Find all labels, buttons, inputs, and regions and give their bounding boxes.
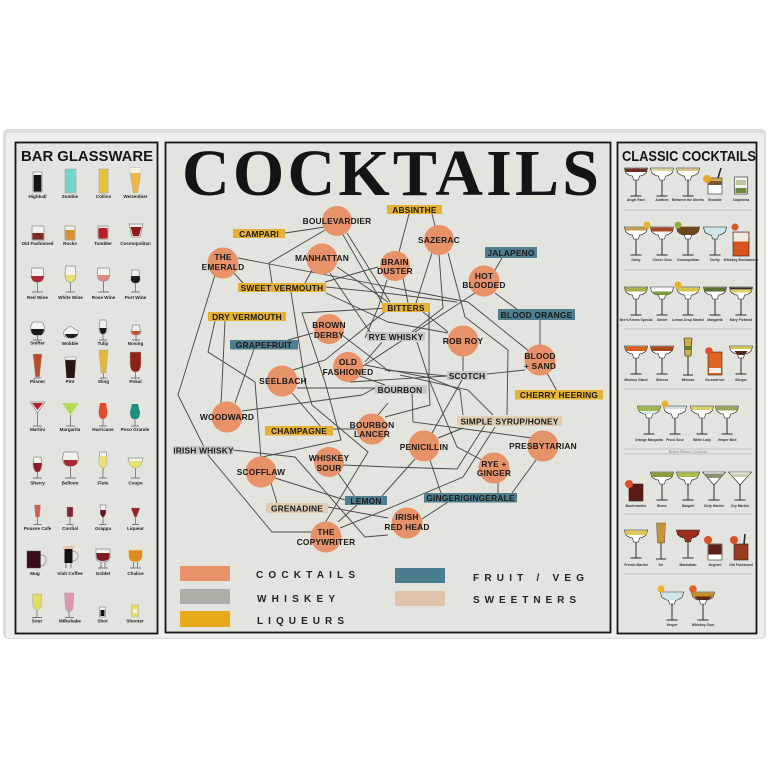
node: hot blooded xyxy=(462,266,506,296)
icon: balloon xyxy=(62,452,79,486)
icon: highball: Highball xyxy=(28,194,47,199)
icon: cordial: Cordial xyxy=(62,526,78,531)
icon: tulip: Tulip xyxy=(98,341,109,346)
node: old fashioned xyxy=(323,352,373,382)
icon: balloon: Balloon xyxy=(62,480,79,486)
glass: cosmopolitan xyxy=(674,222,700,262)
node: sazerac xyxy=(418,225,460,255)
icon: zombie: Zombie xyxy=(62,194,79,199)
glass: dry martini: Dry Martini xyxy=(731,504,749,508)
tag: grapefruit: GRAPEFRUIT xyxy=(236,340,293,350)
icon: martini xyxy=(30,402,45,432)
icon: weizenbier: Weizenbier xyxy=(123,194,148,199)
node: seelbach: SEELBACH xyxy=(259,376,307,386)
glass: between the sheets: Between the Sheets xyxy=(672,198,704,202)
tag: lemon: LEMON xyxy=(350,496,382,506)
glass: old fashioned xyxy=(729,534,753,567)
glass: french martini xyxy=(624,530,648,567)
node: brain duster: BRAIN xyxy=(381,257,409,267)
glass: screwdriver: Screwdriver xyxy=(705,378,725,382)
tag: rye whisky: RYE WHISKY xyxy=(369,332,424,342)
subheading: before dinner cocktails: Before Dinner Cocktails xyxy=(669,449,708,454)
icon: sherry xyxy=(30,457,45,486)
node: brain duster xyxy=(377,251,413,281)
node: bourbon lancer: LANCER xyxy=(354,429,390,439)
glass: gimlet: Gimlet xyxy=(657,318,668,322)
glass: bee's knees xyxy=(620,287,652,322)
icon: pilsner: Pilsner xyxy=(30,379,45,384)
icon: irish coffee xyxy=(57,546,83,576)
legend: COCKTAILS xyxy=(256,570,355,581)
glass: angel face xyxy=(624,168,648,202)
tag: campari: CAMPARI xyxy=(239,229,279,239)
glass: derby: Derby xyxy=(710,258,720,262)
glass: cosmopolitan: Cosmopolitan xyxy=(677,258,699,262)
icon: pilsner xyxy=(30,354,45,384)
network connection lines xyxy=(178,214,557,537)
glass: between the sheets xyxy=(672,168,704,202)
node: brown derby: BROWN xyxy=(312,320,346,330)
heading: bar glassware: BAR GLASSWARE xyxy=(21,148,153,165)
glass: boulevardier: Boulevardier xyxy=(626,504,647,508)
tag: dry vermouth: DRY VERMOUTH xyxy=(212,312,282,322)
icon: chalice: Chalice xyxy=(127,571,144,576)
icon: weizenbier xyxy=(123,168,148,199)
glass: monkey gland: Monkey Gland xyxy=(624,378,648,382)
icon: sling xyxy=(98,350,109,384)
glass: gimlet xyxy=(650,287,674,322)
glass: old fashioned: Old Fashioned xyxy=(729,563,753,567)
tag: grenadine: GRENADINE xyxy=(271,504,323,514)
glass: daisy: Daisy xyxy=(631,258,641,262)
node: the emerald: EMERALD xyxy=(202,262,244,272)
icon: goblet: Goblet xyxy=(96,571,111,576)
node: woodward xyxy=(200,402,254,432)
panel: classic cocktails xyxy=(618,142,759,634)
node: boulevardier: BOULEVARDIER xyxy=(303,216,371,226)
icon: poco grande: Poco Grande xyxy=(121,427,150,432)
glass: mimosa: Mimosa xyxy=(682,378,694,382)
glass: sidecar: Sidecar xyxy=(656,378,669,382)
icon: snifter xyxy=(30,322,45,346)
panel: cocktails network xyxy=(166,137,610,632)
icon: liqueur xyxy=(127,508,144,531)
glass: whiskey bushwacker xyxy=(724,224,759,262)
icon: pint xyxy=(65,357,76,384)
legend: WHISKEY xyxy=(257,594,335,605)
icon: cosmopolitan xyxy=(120,224,151,246)
glass: manhattan: Manhattan xyxy=(680,563,696,567)
row dividers xyxy=(624,210,752,574)
icon: rose wine xyxy=(92,268,116,300)
icon: milkshake: Milkshake xyxy=(59,618,81,624)
icon: coupe: Coupe xyxy=(128,480,143,486)
icon: flute: Flute xyxy=(98,480,109,486)
icon: old fashioned: Old Fashioned xyxy=(22,241,54,246)
icon: cosmopolitan: Cosmopolitan xyxy=(120,241,151,246)
node: whiskey sour xyxy=(309,447,349,477)
glass: boulevardier xyxy=(625,480,647,508)
node: rob roy: ROB ROY xyxy=(443,336,483,346)
glass: bronx: Bronx xyxy=(657,504,667,508)
icon: margarita: Margarita xyxy=(60,427,81,432)
icon: tumbler: Tumbler xyxy=(94,241,112,246)
glass: bee's knees: Bee's Knees Special xyxy=(620,318,652,322)
icon: martini: Martini xyxy=(30,427,45,432)
icon: white wine xyxy=(58,266,83,300)
node: seelbach xyxy=(259,366,307,396)
node: irish red head xyxy=(384,508,430,538)
glass: angel face: Angel Face xyxy=(627,198,645,202)
node: presbytarian: PRESBYTARIAN xyxy=(509,441,577,451)
glass: whiskey bushwacker: Whiskey Bushwacker xyxy=(724,258,759,262)
icon: sherry: Sherry xyxy=(30,480,45,486)
node: the emerald: THE xyxy=(214,252,232,262)
node: presbytarian xyxy=(509,430,577,462)
icon: collins: Collins xyxy=(96,194,112,199)
panel: bar glassware xyxy=(16,142,158,634)
tag: absinthe: ABSINTHE xyxy=(392,205,437,215)
glass: negroni xyxy=(704,536,722,567)
node: rob roy xyxy=(443,326,483,356)
node: hot blooded: BLOODED xyxy=(462,280,506,290)
glass: margarita xyxy=(704,287,726,322)
node: whiskey sour: SOUR xyxy=(316,463,342,473)
icon: port wine: Port Wine xyxy=(125,295,147,300)
glass: negroni: Negroni xyxy=(709,563,721,567)
icon: pokal: Pokal xyxy=(129,379,142,384)
icon: hurricane: Hurricane xyxy=(92,427,114,432)
icon: rose wine: Rose Wine xyxy=(92,295,116,300)
glass: daiquiri xyxy=(676,472,700,508)
icon: sour: Sour xyxy=(32,618,42,624)
icon: pokal xyxy=(129,352,142,384)
glass: dry martini xyxy=(728,472,752,508)
glass: mary pickford: Mary Pickford xyxy=(730,318,752,322)
glass: derby xyxy=(704,227,726,262)
icon: red wine xyxy=(27,268,48,300)
glass: sidecar xyxy=(650,346,674,382)
icon: sour xyxy=(32,594,42,624)
node: the copywriter: THE xyxy=(317,527,335,537)
glass: screwdriver xyxy=(705,347,725,382)
glass: mary pickford xyxy=(730,287,752,322)
node: the copywriter: COPYWRITER xyxy=(297,537,355,547)
glass: bramble: Bramble xyxy=(708,198,722,202)
node: rye and ginger: GINGER xyxy=(477,468,511,478)
icon: shot: Shot xyxy=(97,618,108,624)
node: hot blooded: HOT xyxy=(475,271,494,281)
icon: pint: Pint xyxy=(66,379,75,384)
tag: bourbon: BOURBON xyxy=(378,385,422,395)
icon: liqueur: Liqueur xyxy=(127,526,144,531)
glass: vesper xyxy=(658,586,684,627)
node: scofflaw: SCOFFLAW xyxy=(237,467,285,477)
icon: wobble: Wobble xyxy=(62,341,79,346)
icon: rocks: Rocks xyxy=(63,241,77,246)
icon: port wine xyxy=(125,270,147,300)
node: brain duster: DUSTER xyxy=(377,266,413,276)
glass: clover club xyxy=(650,227,674,262)
icon: pousse cafe: Pousse Cafe xyxy=(24,526,52,531)
glass: pisco sour xyxy=(662,400,686,442)
icon: red wine: Red Wine xyxy=(27,295,48,300)
tag: simple syrup honey: SIMPLE SYRUP/HONEY xyxy=(460,416,559,426)
node: brown derby xyxy=(312,314,346,344)
node: old fashioned: OLD xyxy=(339,357,357,367)
node: woodward: WOODWARD xyxy=(200,412,254,422)
glass: monkey gland xyxy=(624,346,648,382)
glass: manhattan xyxy=(676,530,700,567)
node: bourbon lancer: BOURBON xyxy=(350,420,394,430)
node: bourbon lancer xyxy=(350,414,394,444)
glass: orange margarita: Orange Margarita xyxy=(635,438,663,442)
glass: kir xyxy=(656,523,666,567)
node: rye and ginger: RYE + xyxy=(481,459,507,469)
node: old fashioned: FASHIONED xyxy=(323,367,373,377)
tag: irish whisky: IRISH WHISKY xyxy=(173,446,234,456)
glass: dirty martini xyxy=(702,472,726,508)
icon: nosing xyxy=(128,325,143,346)
glass: orange margarita xyxy=(635,406,663,442)
tag: sweet vermouth: SWEET VERMOUTH xyxy=(241,283,323,293)
icon: hurricane xyxy=(92,403,114,432)
glass: aviation xyxy=(650,168,674,202)
icon: mug: Mug xyxy=(30,571,40,576)
tag: blood orange: BLOOD ORANGE xyxy=(501,310,573,320)
icon: grappa xyxy=(95,505,111,531)
icon: mug xyxy=(27,551,46,576)
glass: aviation: Aviation xyxy=(655,198,669,202)
node: the copywriter xyxy=(297,522,355,552)
node: manhattan: MANHATTAN xyxy=(295,253,349,263)
icon: irish coffee: Irish Coffee xyxy=(57,571,83,576)
glass: caipirinha: Caipirinha xyxy=(733,198,749,202)
glass: french martini: French Martini xyxy=(624,563,648,567)
glass: white lady: White Lady xyxy=(693,438,711,442)
node: penicillin: PENICILLIN xyxy=(400,442,448,452)
glass: margarita: Margarita xyxy=(707,318,723,322)
icon: poco grande xyxy=(121,404,150,432)
glass: bramble xyxy=(703,168,722,202)
icon: snifter: Snifter xyxy=(30,340,45,346)
icon: cordial xyxy=(62,507,78,531)
glass: dirty martini: Dirty Martini xyxy=(704,504,724,508)
icon: white wine: White Wine xyxy=(58,295,83,300)
glass: whiskey sour xyxy=(689,585,715,627)
glass: daiquiri: Daiquiri xyxy=(682,504,694,508)
icon: tulip xyxy=(98,320,109,346)
legend xyxy=(180,566,584,627)
icon: zombie xyxy=(62,169,79,199)
node: sazerac: SAZERAC xyxy=(418,235,460,245)
icon: shooter: Shooter xyxy=(126,618,144,624)
tag: jalapeno: JALAPENO xyxy=(487,248,535,258)
icon: goblet xyxy=(96,549,111,576)
glass: bronx xyxy=(650,472,674,508)
icon: grappa: Grappa xyxy=(95,526,111,531)
glass: clover club: Clover Club xyxy=(652,258,672,262)
icon: pousse cafe xyxy=(24,505,52,531)
glass: stinger xyxy=(730,346,752,382)
glass: mimosa xyxy=(682,338,694,382)
icon: rocks xyxy=(63,226,77,246)
node: manhattan xyxy=(295,244,349,274)
tag: bitters: BITTERS xyxy=(387,303,425,313)
node: rye and ginger xyxy=(477,452,511,484)
icon: tumbler xyxy=(94,226,112,246)
glass: whiskey sour: Whiskey Sour xyxy=(692,623,715,627)
poster background xyxy=(6,133,764,638)
icon: chalice xyxy=(127,550,144,576)
glass: white lady xyxy=(690,406,714,442)
icon: nosing: Nosing xyxy=(128,341,143,346)
tag: cherry heering: CHERRY HEERING xyxy=(520,390,598,400)
title: COCKTAILS xyxy=(182,137,599,210)
node: whiskey sour: WHISKEY xyxy=(309,453,349,463)
icon: flute xyxy=(98,452,109,486)
node: blood and sand: BLOOD xyxy=(524,351,556,361)
glass: lemon drop martini xyxy=(672,282,704,322)
icon: sling: Sling xyxy=(98,379,109,384)
icon: old fashioned xyxy=(22,226,54,246)
node: irish red head: IRISH xyxy=(395,512,419,522)
glass: daisy xyxy=(624,222,650,262)
node: penicillin xyxy=(400,430,448,462)
node: irish red head: RED HEAD xyxy=(384,522,430,532)
legend: SWEETNERS xyxy=(473,595,576,606)
node: the emerald xyxy=(202,248,244,278)
tag: ginger gingerale: GINGER/GINGERALE xyxy=(426,493,515,503)
icon: milkshake xyxy=(59,593,81,624)
node: boulevardier xyxy=(303,206,371,236)
icon: coupe xyxy=(128,458,143,486)
glass: caipirinha xyxy=(733,177,749,202)
icon: highball xyxy=(28,172,47,199)
tag: scotch: SCOTCH xyxy=(449,371,485,381)
glass: kir: Kir xyxy=(659,563,664,567)
glass: lemon drop martini: Lemon Drop Martini xyxy=(672,318,704,322)
icon: shot xyxy=(97,607,108,624)
icon: margarita xyxy=(60,403,81,432)
node: brown derby: DERBY xyxy=(314,330,344,340)
glass: stinger: Stinger xyxy=(735,378,748,382)
glass: vesper bird xyxy=(716,406,738,442)
node: blood and sand xyxy=(524,344,556,376)
legend: FRUIT / VEG xyxy=(473,573,584,584)
glass: vesper bird: Vesper Bird xyxy=(718,438,736,442)
icon: shooter xyxy=(126,605,144,624)
node: scofflaw xyxy=(237,456,285,488)
legend: LIQUEURS xyxy=(257,616,344,627)
node: blood and sand: + SAND xyxy=(524,361,556,371)
glass: vesper: Vesper xyxy=(666,623,678,627)
icon: collins xyxy=(96,169,112,199)
glass: pisco sour: Pisco Sour xyxy=(666,438,685,442)
tag: champagne: CHAMPAGNE xyxy=(271,426,327,436)
icon: wobble xyxy=(62,326,79,346)
